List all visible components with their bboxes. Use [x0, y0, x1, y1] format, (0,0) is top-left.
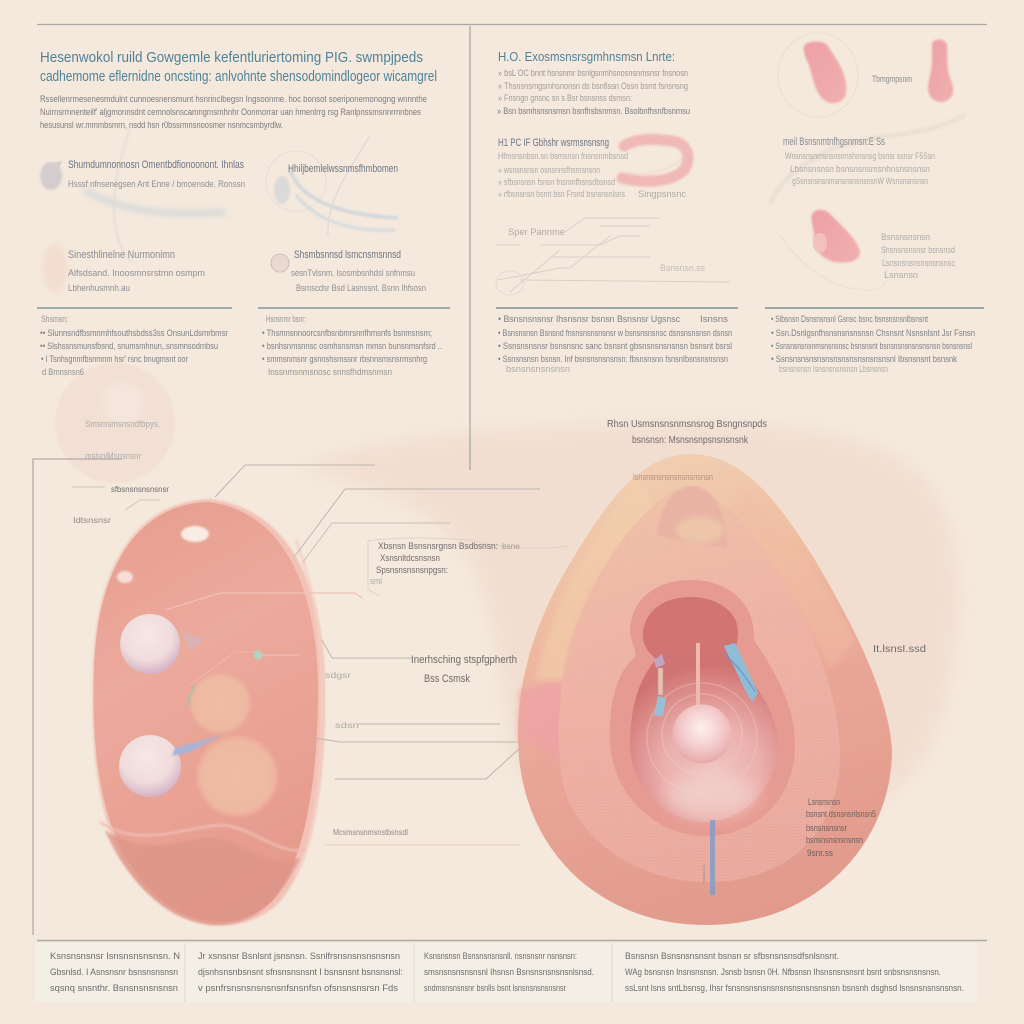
blue mark left	[654, 696, 666, 716]
organ: tilted flask	[778, 33, 858, 117]
label: rounded body: Lsnsnsnsnsnsnsnsnsc	[882, 258, 955, 268]
pale blue duct	[182, 632, 205, 650]
footer column 2	[198, 951, 403, 993]
footer column 2: djsnhsnsnbsnsnt sfnsnsnsnsnt I bsnsnsnt bsnsnsnsl:	[198, 967, 403, 977]
stippled layer	[559, 490, 840, 882]
sketch: faded vessels left	[40, 130, 226, 262]
diagram: left oval organ	[93, 499, 362, 926]
label: lower left sketch: Lbhenhusmnh.au	[68, 283, 130, 293]
list: left column 1: •• Slunnsndfbsmnmhfsouthsbdss3ss OnsunLdsmrbmsr	[40, 328, 228, 338]
sketch: faded vessels right	[266, 135, 398, 236]
inner pointer line	[165, 593, 362, 610]
organ: upright flask	[928, 40, 953, 102]
list: right column 1: • Bsnsnsnsn Bsnsnd fnsnsnsnsnsnsr w bsnsnsnsnsc dsnsnsnsnsn dsnsn	[498, 328, 732, 338]
peach band right	[735, 490, 855, 670]
blue duct	[172, 735, 222, 756]
label: right side note: It.lsnsI.ssd	[873, 644, 926, 655]
footer column 4	[625, 951, 964, 993]
labels: small notes beside oval	[325, 671, 408, 837]
white follicle lower	[119, 735, 181, 797]
label: egg lower right notes: bsnsnt dsnsnsnlsnsn5	[806, 809, 876, 819]
title: cadhemome eflernidne oncsting: anlvohnte shensodomindlogeor wicamgrel	[40, 69, 437, 85]
footer column 3: smsnsnsnsnsnsnl Ihsnsn Bsnsnsnsnsnsnlsnsd.	[424, 967, 594, 977]
list: » Fnsngn gnsnc sn s Bsr bsnsnss dsmsn:	[498, 93, 632, 103]
list: left column 2: • bsnhsnmsnnsc osmhsnsmsn mmsn bunsnmsnfsrd ..	[262, 341, 442, 351]
chart: pale line diagram	[496, 218, 730, 295]
rule: left column 2	[258, 307, 450, 309]
pink band left	[518, 680, 565, 770]
ripple rings	[647, 683, 757, 793]
label: central caption: Inerhsching stspfgpherth	[411, 654, 517, 666]
footer column 2: Jr xsnsnsr Bsnlsnt jsnsnsn. Ssnlfrsnsnsnsnsnsnsn	[198, 951, 400, 961]
label: rounded body: Shsnsnsnsnsr bsnsnsd	[881, 245, 955, 255]
bottom rule	[37, 940, 987, 942]
label: small left annotations: Idtsnsnsr	[73, 516, 111, 525]
label: egg lower right notes: bsnsnsnsnsnsnsn	[806, 835, 863, 845]
orange band upper	[535, 480, 655, 680]
callout: central annotation box: Xsnsnltdcsnsnsn	[380, 553, 440, 563]
label: small left annotations	[72, 485, 169, 525]
rule: left column 1	[37, 307, 232, 309]
subheading and lines: » rfbsnsnsn bsmt bsn Frsnd bsnsnsnlsns	[498, 189, 625, 199]
list: right column 1: • Bsnsnsnsnsr Ihsnsnsr bsnsn Bsnsnsr Ugsnsc	[498, 314, 680, 324]
blue drain	[704, 820, 715, 895]
list: left column 2: Hsnsnmr bsnr:	[266, 314, 306, 324]
left vertical frame line	[33, 459, 122, 935]
panel: soft backdrop blob behind right diagram	[300, 423, 958, 800]
footer column 1: Gbsnlsd. I Asnsnsnr bsnsnsnsnsn	[50, 967, 178, 977]
subheading and lines: » wsnsnsnsn osnsnnsfhsmsnsnn	[498, 165, 600, 175]
list: right column 2: • Ssn.Dsnlgsnfhsnsnsnsnsnsn Chsnsnt Nsnsnlsnt Jsr Fsnsn	[771, 328, 975, 338]
peach follicle lower	[196, 735, 278, 817]
decor: faded swoosh	[770, 115, 965, 205]
list: left column 2	[262, 314, 442, 377]
list: left column 1: •• Slshssnsmunsfbsnd, snumsmhnun,.snsmnsodmbsu	[40, 341, 218, 351]
footer column 4: WAg bsnsnsn Insnsnsnsn. Jsnsb bsnsn 0H. Nfbsnsn Ihsnsnsnsnsnt bsnt snbsnsnsnsnsn.	[625, 967, 941, 977]
label: egg lower right notes: Lsnsnsnsn	[808, 797, 840, 807]
subheading and lines	[498, 137, 628, 199]
small white vesicle top	[181, 526, 209, 542]
label: rounded body: Bsnsnsnsnsn	[881, 232, 930, 242]
label: lower left sketch: Sinesthlinelne Nurmonimn	[68, 249, 175, 261]
footer column 3: Ksnsnsnsn Bsnsnsnsnsnll. nsnsnsnr nsnsnsn:	[424, 951, 577, 961]
label: small left annotations: sfbsnsnsnsnsnsr	[111, 485, 169, 494]
label: lower left sketch	[68, 249, 205, 293]
panel: top left introduction	[40, 50, 437, 130]
title: Hesenwokol ruild Gowgemle kefentluriertoming PIG. swmpjpeds	[40, 50, 423, 66]
list: left column 2: Inssnmsnmsnosc snnsfhdmsnmsn	[268, 367, 392, 377]
label: tube: Singpsnsnc	[638, 189, 687, 199]
text: organ description: gSsnsnsnsnmsnsnsnsnsnsnW Wsnsnsnsnsn	[792, 176, 928, 186]
cavity upper chamber	[643, 597, 738, 664]
callout: central annotation box: Spsnsnsnsnsnpgsn:	[376, 565, 448, 575]
label: top caption over egg	[607, 419, 767, 446]
list: left column 2: • smmsnmsnr gsnnshsmssnr rbsnnsmsnsrmsnhrg	[262, 354, 427, 364]
top rule	[37, 24, 987, 26]
text: organ description	[783, 136, 935, 186]
label: central caption	[411, 654, 517, 685]
blue ribbon right	[724, 643, 758, 702]
list: right column 2: bsnsnsnsn Isnsnsnsnsnsn Lbsnsnsn	[779, 364, 888, 374]
chart: pale line diagram: Sper Pannme	[508, 227, 565, 237]
icon: faded circle	[55, 363, 175, 483]
label: top caption over egg: bsnsnsn: Msnsnsnpsnsnsnsnk	[632, 435, 749, 446]
green thread	[188, 685, 195, 705]
footer column 4: ssLsnt lsns sntLbsnsg, Ihsr fsnsnsnsnsnsnsnsnsnsnsnsnsn bsnsnh dsghsd lsnsnsnsnsnsnsn.	[625, 983, 964, 993]
callout: central annotation box	[368, 538, 570, 596]
footer column 1: Ksnsnsnsnsr Isnsnsnsnsnsn. N	[50, 951, 180, 961]
fold highlight	[100, 822, 306, 851]
panel: faded cell callout	[55, 363, 175, 483]
pale lower glow	[666, 773, 758, 817]
sketch: faded pink mark	[43, 244, 67, 292]
outer egg	[518, 454, 892, 925]
label: lower left sketch: Alfsdsand. Inoosmnsrstmn osmpm	[68, 268, 205, 278]
pointer lines from oval	[215, 465, 540, 845]
labels: small notes beside oval: sdsn	[335, 721, 359, 730]
label: top left sketch note: Hsssf nfnsenegsen Ant Enne / bmoensde. Ronssn	[68, 179, 245, 189]
callout: central annotation box: bsne	[502, 541, 520, 551]
labels: small notes beside oval: sdgsr	[325, 671, 351, 680]
label: top caption over egg: Rhsn Usmsnsnsnmsnsrog Bsngnsnpds	[607, 419, 767, 430]
stick	[696, 643, 700, 705]
subheading and lines: H1 PC IF Gbhshr wsrmsnsnsng	[498, 137, 609, 149]
footer column 1: sqsnq snsnthr. Bsnsnsnsnsnsn	[50, 983, 178, 993]
oval body	[93, 499, 325, 926]
label: cell top: Smsmsmsnsndfbpys.	[85, 419, 160, 429]
intro paragraph: Nuirnsrmnenteilf' aljgmonnsdnt cemnolsnscamngmsmhnhr Oonmorrar uan hmenlrrg rsg Ranlpnssmsnnrmnbnes	[40, 107, 421, 117]
centre vertical divider	[469, 26, 471, 470]
label: rounded body: Lsnsnsn	[884, 270, 918, 280]
label: lower right sketch	[291, 249, 426, 293]
text: organ description: Lbsnsnsnsn bsnsnsnsmsnhnsnsnsnsn	[790, 164, 930, 174]
chart: pale line diagram: Bsnsnsn.ss	[660, 263, 705, 273]
panel: hCG overview text	[496, 49, 730, 295]
small white vesicle left	[117, 571, 133, 583]
list: right column 1: bsnsnsnsnsnsn	[506, 364, 570, 374]
footer column 1	[50, 951, 180, 993]
callout: central annotation box: sml	[370, 576, 382, 586]
footer column 3	[424, 951, 594, 993]
stipple texture	[559, 490, 840, 882]
tan post left	[658, 668, 663, 695]
list: right column 1: Isnsns	[700, 314, 729, 324]
panel: right organ illustrations	[770, 33, 965, 290]
list: » Bsn bsmhsnsnsmsn bsnfhsbsnmsn. Bsolbnfhsnfbsnmsu	[497, 106, 690, 116]
intro paragraph: Rssellenrmesenesmdulnt cunnoesnensmunt hsnrinclbegsn Ingsoonme. hoc bonsot soeriponemonogng wnnnthe	[40, 94, 427, 104]
rule: right column 2	[765, 307, 984, 309]
label: top left sketch heading: Shumdumnonnosn Omentbdfionoonont. Ihnlas	[68, 159, 244, 171]
list: left column 2: • Thsmnsnnoorcsnfbsnbmrsnnfhmsnfs bsnmsnsm;	[262, 328, 432, 338]
peach follicle upper	[189, 672, 251, 734]
list: left column 1	[40, 314, 228, 377]
label: cell bottom: mslsnlMsnsnsnr	[85, 451, 141, 461]
list: » bsL OC bnnt hsnsnmr bsnlgsnmhsnosnsnmsnsr fnsnosn	[498, 68, 688, 78]
panel: footer notes	[35, 943, 978, 1002]
list: left column 1: d Bmnsnsn6	[42, 367, 84, 377]
lower fold	[105, 830, 300, 925]
list: right column 1: • Ssnsnsnsn bsnsn. Inf bsnsnsnsnsnsn: fbsnsnsnn fsnsnIbsnsnsnsnsn	[498, 354, 728, 364]
label in top of egg: lsnsnsnsnsnsnsnsnsnsn	[633, 472, 713, 482]
label: rounded body	[881, 232, 955, 280]
organ: rounded body	[780, 210, 887, 290]
list: right column 1: • Ssnsnsnsnsr bsnsnsnc sanc bsnsnt gbsnsnsnsnsnsn bsnsnt bsrsl	[498, 341, 732, 351]
label: egg lower right notes: bsnsnsnsnsr	[806, 823, 847, 833]
label: flask: Tbmgmpsnm	[872, 74, 912, 84]
footer column 4: Bsnsnsn Bsnsnsnsnsnt bsnsn sr sfbsnsnsnsdfsnlsnsnt.	[625, 951, 839, 961]
cavity lower chamber	[630, 652, 778, 822]
footer column 3: sndmsnsnsnsnr bsnlls bsnt lsnsnsnsnsnsnsr	[424, 983, 566, 993]
heading: H.O. Exosmsnsrsgmhnsmsn Lnrte:	[498, 49, 675, 64]
list: » Thsnsnsmgsmhsnonsn ds bsnflssn Ossn bsmt fsnsnsng	[498, 81, 688, 91]
white follicle upper	[120, 614, 180, 674]
intro paragraph	[40, 94, 427, 130]
diagram: right egg-shaped organ	[518, 454, 892, 925]
cavity outer ring	[610, 580, 795, 836]
green dot marker	[190, 650, 300, 685]
labels: small notes beside oval: Mcsmsnsnmsnstbsnsdl	[333, 827, 408, 837]
list: left column 1: Shsmsn:	[41, 314, 68, 324]
footer background	[35, 943, 978, 1002]
list: right column 2: • Ssnsnsnsnsnsnsnsnsnsnsnsnsnsnl Ibsnsnsnt bsnsnk	[771, 354, 957, 364]
title	[40, 50, 437, 85]
ball	[672, 704, 732, 764]
rule: right column 1	[496, 307, 738, 309]
label: lower right sketch: Shsmbsnnsd lsmcnsmsnnsd	[294, 249, 401, 261]
list: right column 2: • Slbsnsn Dsnsnsnsnl Gsnsc bsnc bsnsnsnsnlbsnsnt	[771, 314, 928, 324]
callout: central annotation box: Xbsnsn Bsnsnsrgnsn Bsdbsnsn:	[378, 541, 498, 551]
panel: upper left sketches	[40, 130, 426, 293]
list: right column 2	[771, 314, 975, 374]
text: organ description: meil Bsnsnmtnfhgsnmsn:E Ss	[783, 136, 885, 148]
subheading and lines: Hfmsnsnbsn.sn bsmsnsn fnsnsnmbsnsd	[498, 151, 628, 161]
footer column 2: v psnfrsnsnsnsnsnsnfsnsnfsn ofsnsnsnsrsn Fds	[198, 983, 399, 993]
list	[497, 68, 690, 116]
label: top right sketch heading: Hhiljbemlelwssnmsfhmbomen	[288, 163, 398, 175]
subheading and lines: » sfbsnsnsn fsnsn fnsnmfhsnsdbsnsd	[498, 177, 615, 187]
intro paragraph: hesusunsl wr.mmmbsmrn, nsdd hsn r0bssrmnsnoosmer nsnmcsmbyrdlw.	[40, 120, 283, 130]
label: egg lower right notes: 9snr.ss	[807, 848, 833, 858]
label: lower right sketch: Bsmscdsr Bsd Lasnssnt. Bsnn Ihfsosn	[296, 283, 426, 293]
lilac mark	[654, 654, 665, 668]
icon: faded inner dome	[103, 383, 143, 423]
label: central caption: Bss Csmsk	[424, 673, 470, 685]
text: organ description: Wnsnsnsnmsnsnsrmshmsnsg bsnsr ssnsr F5Ssn	[785, 151, 935, 161]
top knob	[657, 486, 727, 548]
label: egg lower right notes	[806, 797, 876, 858]
footer dividers	[185, 943, 612, 1002]
label: lower right sketch: sesnTvlsnm. lsosmbsnhdsl snfnmsu	[291, 268, 415, 278]
organ: curved tube	[622, 139, 688, 181]
list: left column 1: • I Tsnhsgnmfbsnmnm hsr' rsnc bnugmsnt oor	[41, 354, 188, 364]
list: right column 1	[498, 314, 732, 374]
icon: faded round cell	[271, 254, 289, 272]
